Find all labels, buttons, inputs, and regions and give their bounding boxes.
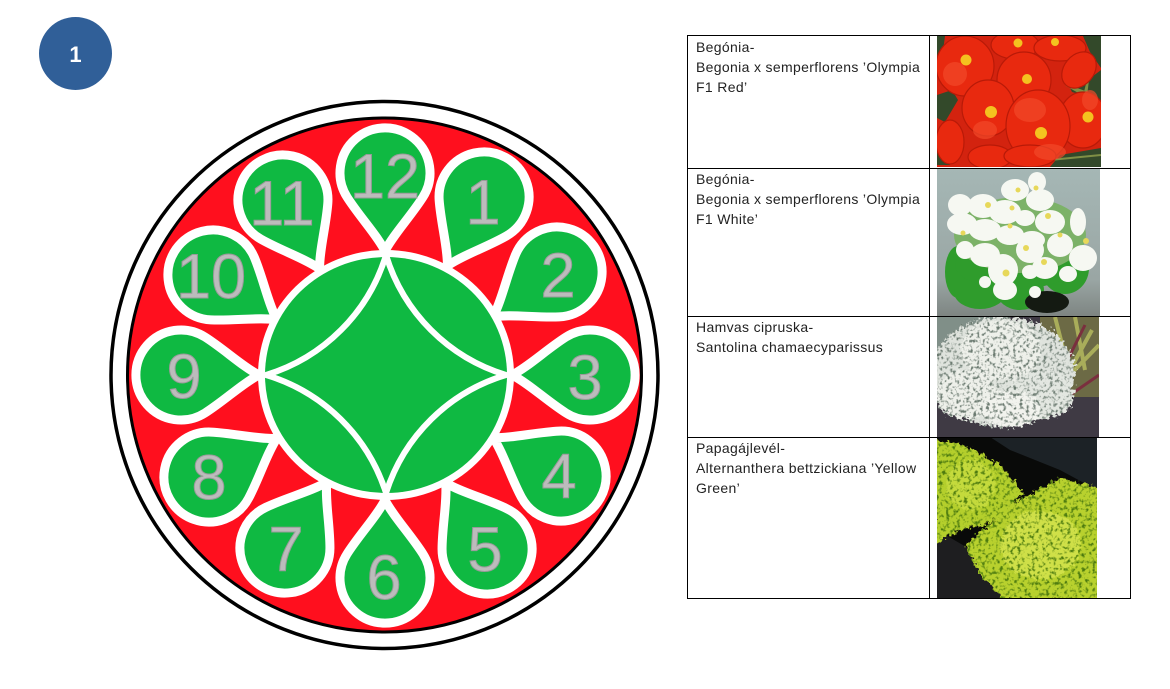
petal numbers: 7 (268, 515, 304, 585)
petal numbers: 4 (541, 442, 577, 512)
text: santolina: Santolina chamaecyparissus (696, 339, 883, 355)
flower bed plan (109, 100, 660, 650)
central white disc (258, 250, 514, 500)
petal numbers: 8 (191, 443, 227, 513)
text: santolina: Hamvas cipruska- (696, 319, 813, 335)
red planting ring (128, 118, 642, 632)
petal numbers: 1 (465, 168, 501, 238)
badge: number 1 (39, 17, 112, 90)
text: alternanthera: Green’ (696, 480, 740, 496)
petal numbers: 10 (176, 242, 246, 312)
photo: santolina (937, 317, 1099, 437)
petal numbers: 12 (350, 142, 420, 212)
petal numbers: 2 (540, 241, 576, 311)
text: santolina (696, 319, 883, 355)
text: alternanthera: Papagájlevél- (696, 440, 785, 456)
photo: white begonia (937, 169, 1100, 316)
text: begonia red: F1 Red’ (696, 79, 747, 95)
outer black ring (111, 102, 658, 648)
badge: number 1: 1 (69, 42, 82, 67)
text: alternanthera (696, 440, 916, 496)
text: begonia red: Begonia x semperflorens ’Olympia (696, 59, 920, 75)
text: begonia red: Begónia- (696, 39, 755, 55)
photo: alternanthera (937, 438, 1097, 598)
photo: red begonia (937, 36, 1101, 167)
text: alternanthera: Alternanthera bettzickiana ’Yellow (696, 460, 916, 476)
central green circle with four-point star (260, 252, 512, 498)
text: begonia red (696, 39, 920, 95)
text: begonia white: Begónia- (696, 171, 755, 187)
text: begonia white: Begonia x semperflorens ’Olympia (696, 191, 920, 207)
text: begonia white: F1 White’ (696, 211, 758, 227)
petal numbers: 9 (166, 342, 202, 412)
petal numbers: 5 (467, 515, 503, 585)
petal numbers (166, 142, 603, 613)
petal ring (136, 128, 635, 623)
petal numbers: 11 (249, 169, 315, 239)
text: begonia white (696, 171, 920, 227)
petal numbers: 3 (567, 343, 603, 413)
petal numbers: 6 (366, 543, 402, 613)
